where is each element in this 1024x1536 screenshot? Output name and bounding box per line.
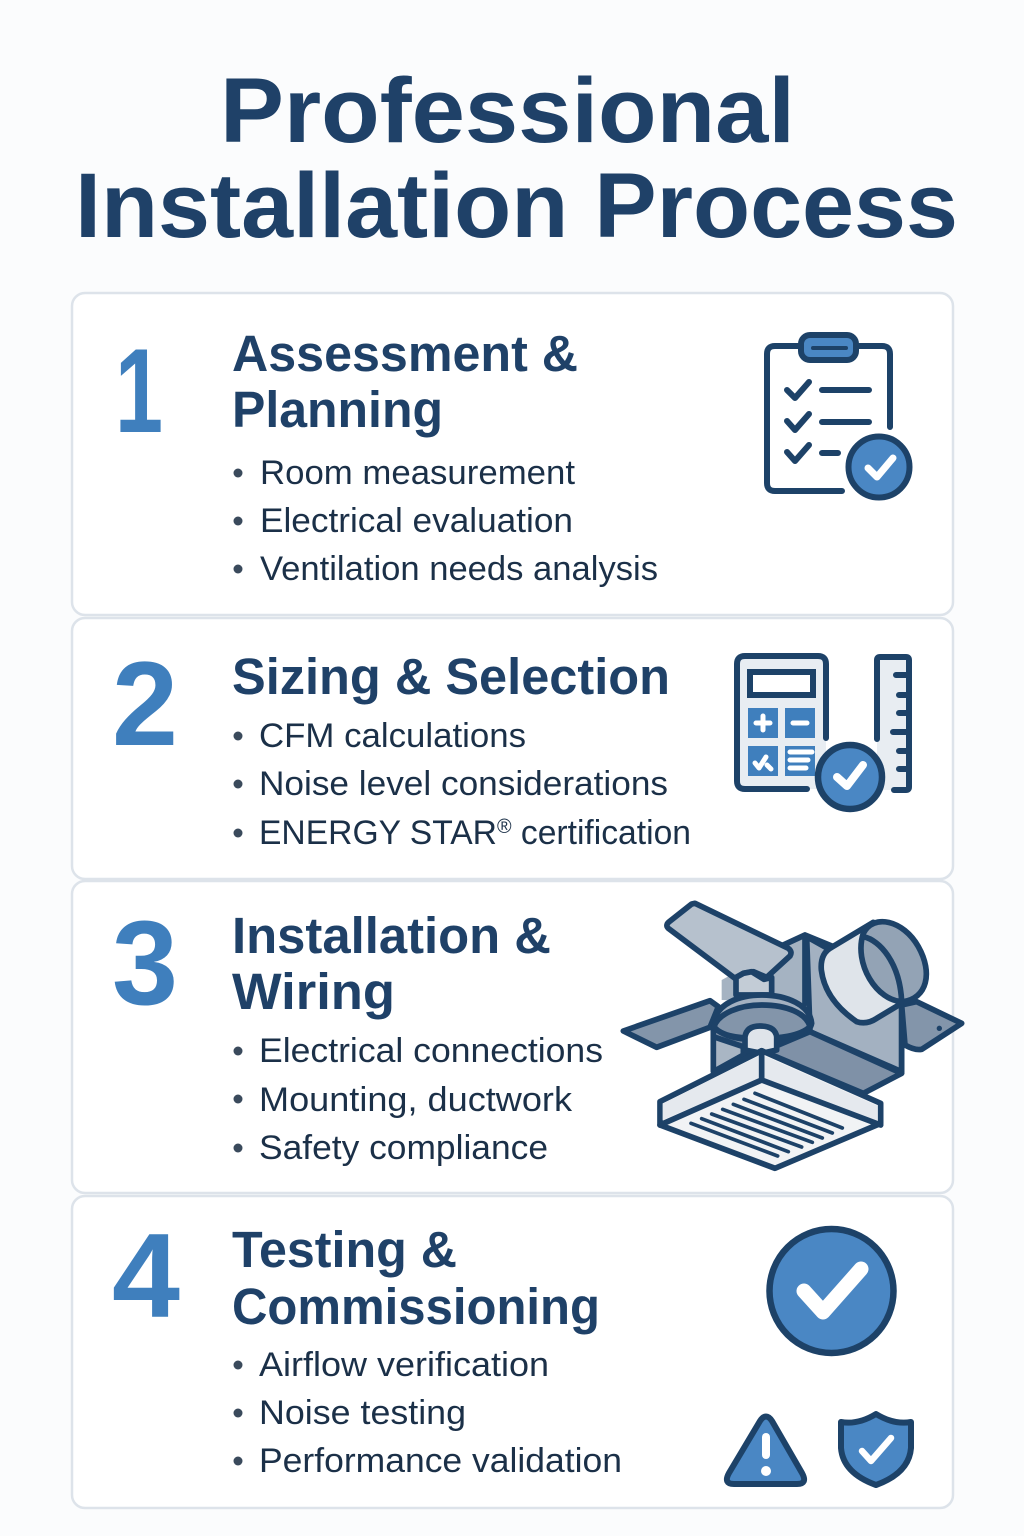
bullet list: step 2: Noise level considerations [259, 765, 668, 803]
bullet list: step 2: ENERGY STAR [259, 814, 500, 852]
step number 4: 4 [112, 1209, 180, 1343]
bullet list: step 4: Airflow verification [259, 1346, 549, 1384]
heading: assessment and planning: Planning [232, 381, 443, 438]
bullet list: step 3: Electrical connections [259, 1032, 603, 1070]
title: Installation Process [75, 155, 958, 257]
bullet list: step 4: Performance validation [259, 1442, 622, 1480]
bullet list: step 2: CFM calculations [259, 717, 526, 755]
bullet list: step 2: certification [512, 814, 691, 852]
heading: testing and commissioning: Testing & [232, 1221, 457, 1278]
heading: assessment and planning: Assessment & [232, 325, 578, 382]
icon: exhaust fan unit [623, 903, 962, 1168]
panel: step 2 sizing and selection [72, 618, 953, 879]
bullet list: step 3 [234, 1032, 603, 1167]
heading: testing and commissioning: Commissioning [232, 1278, 600, 1335]
bullet list: step 3: Safety compliance [259, 1129, 548, 1167]
bullet list: step 1: Electrical evaluation [260, 502, 573, 540]
bullet list: step 1: Ventilation needs analysis [260, 550, 658, 588]
icon: warning triangle [727, 1416, 804, 1484]
panel: step 3 installation and wiring [72, 881, 962, 1193]
icon: clipboard checklist [767, 335, 910, 498]
step number 2: 2 [112, 637, 178, 771]
heading: installation and wiring [232, 907, 551, 1020]
bullet list: step 1: Room measurement [260, 454, 576, 492]
bullet list: step 2: ® [497, 816, 512, 838]
step number 1: 1 [115, 324, 163, 458]
heading: sizing and selection: Sizing & Selection [232, 648, 670, 705]
icon: calculator and ruler [737, 656, 909, 809]
icon: large check circle [770, 1229, 894, 1353]
bullet list: step 1 [234, 454, 658, 588]
icon: shield check [841, 1414, 911, 1485]
bullet list: step 3: Mounting, ductwork [259, 1081, 573, 1119]
bullet list: step 2 [234, 717, 691, 852]
step number 3: 3 [112, 896, 178, 1030]
heading: installation and wiring: Installation & [232, 907, 551, 964]
panel: step 1 assessment and planning [72, 293, 953, 615]
heading: testing and commissioning [232, 1221, 600, 1335]
title: Professional [220, 60, 795, 162]
bullet list: step 4: Noise testing [259, 1394, 466, 1432]
panel: step 4 testing and commissioning [72, 1196, 953, 1508]
bullet list: step 4 [234, 1346, 622, 1480]
heading: assessment and planning [232, 325, 578, 438]
title [75, 60, 958, 257]
heading: installation and wiring: Wiring [232, 963, 395, 1020]
